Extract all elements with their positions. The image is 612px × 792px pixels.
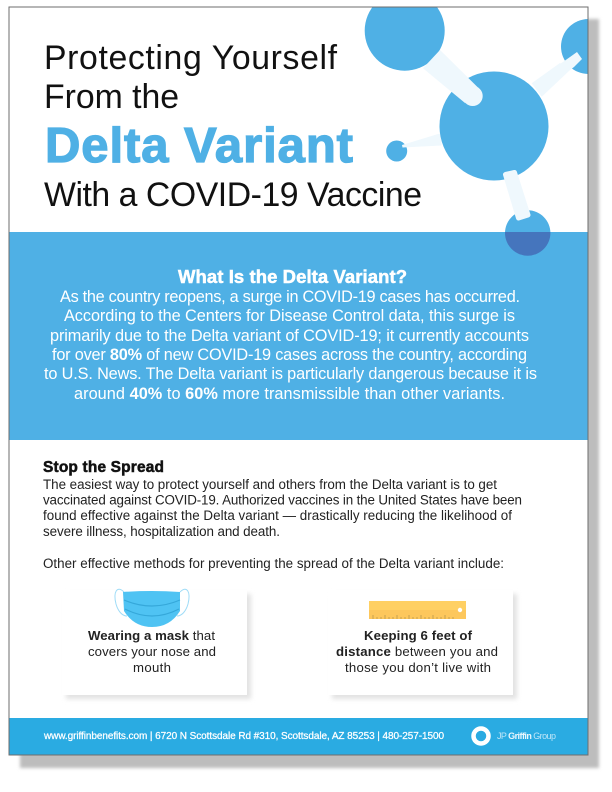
section heading: Stop the Spread — [43, 459, 164, 476]
card: keeping distance — [328, 590, 517, 699]
molecule: top bond — [423, 50, 483, 106]
card: wearing a mask — [62, 589, 251, 699]
card text — [336, 628, 498, 675]
section body: found effective against the Delta variant — drastically reducing the likelihood of — [43, 508, 512, 523]
band body: for over 80% of new COVID-19 cases across the country, according — [52, 346, 527, 364]
title line 2: From the — [44, 78, 179, 116]
band heading: What Is the Delta Variant? — [178, 266, 407, 287]
section body — [43, 477, 522, 539]
icon: ruler — [369, 601, 466, 619]
molecule: right bond back — [532, 63, 570, 97]
title line 4: With a COVID-19 Vaccine — [44, 176, 422, 214]
card text: covers your nose and — [88, 644, 216, 659]
card text: Keeping 6 feet of — [364, 628, 473, 643]
card text — [88, 628, 216, 675]
card text: mouth — [133, 660, 171, 675]
band body: As the country reopens, a surge in COVID-19 cases has occurred. — [60, 288, 520, 306]
band body: to U.S. News. The Delta variant is particularly dangerous because it is — [44, 365, 537, 383]
icon: face mask — [115, 589, 189, 627]
band body: around 40% to 60% more transmissible than other variants. — [74, 385, 505, 403]
text block: delta variant explanation — [44, 266, 537, 403]
card text: distance between you and — [336, 644, 498, 659]
logo: JP Griffin Group: JP Griffin Group — [497, 731, 556, 741]
section body: vaccinated against COVID-19. Authorized vaccines in the United States have been — [43, 492, 522, 508]
molecule: right bond tip — [561, 52, 582, 70]
molecule: right atom — [561, 19, 588, 74]
methods intro: Other effective methods for preventing the spread of the Delta variant include: — [43, 556, 504, 571]
molecule: small atom — [386, 140, 407, 162]
title highlight: Delta Variant — [45, 119, 353, 173]
panel: what is the delta variant band — [9, 232, 588, 440]
title — [44, 39, 422, 214]
title line 1: Protecting Yourself — [44, 39, 338, 77]
molecule: bottom atom — [505, 210, 550, 256]
band body: According to the Centers for Disease Control data, this surge is — [64, 307, 515, 325]
band body — [44, 288, 537, 403]
logo: JP Griffin Group — [474, 728, 556, 744]
molecule: top atom — [365, 0, 445, 71]
section body: The easiest way to protect yourself and others from the Delta variant is to get — [43, 477, 497, 492]
card text: those you don’t live with — [345, 660, 491, 675]
text block: stop the spread — [43, 459, 522, 571]
molecule: central atom — [440, 72, 548, 180]
footer bar — [9, 718, 588, 755]
footer contact line: www.griffinbenefits.com | 6720 N Scottsdale Rd #310, Scottsdale, AZ 85253 | 480-257-1500 — [43, 731, 444, 742]
molecule: bottom bond — [506, 172, 528, 218]
molecule: small bond — [402, 133, 442, 148]
card text: Wearing a mask that — [88, 628, 215, 643]
band body: primarily due to the Delta variant of COVID-19; it currently accounts — [50, 327, 529, 345]
illustration: molecule — [364, 8, 588, 256]
section body: severe illness, hospitalization and death. — [43, 524, 280, 539]
